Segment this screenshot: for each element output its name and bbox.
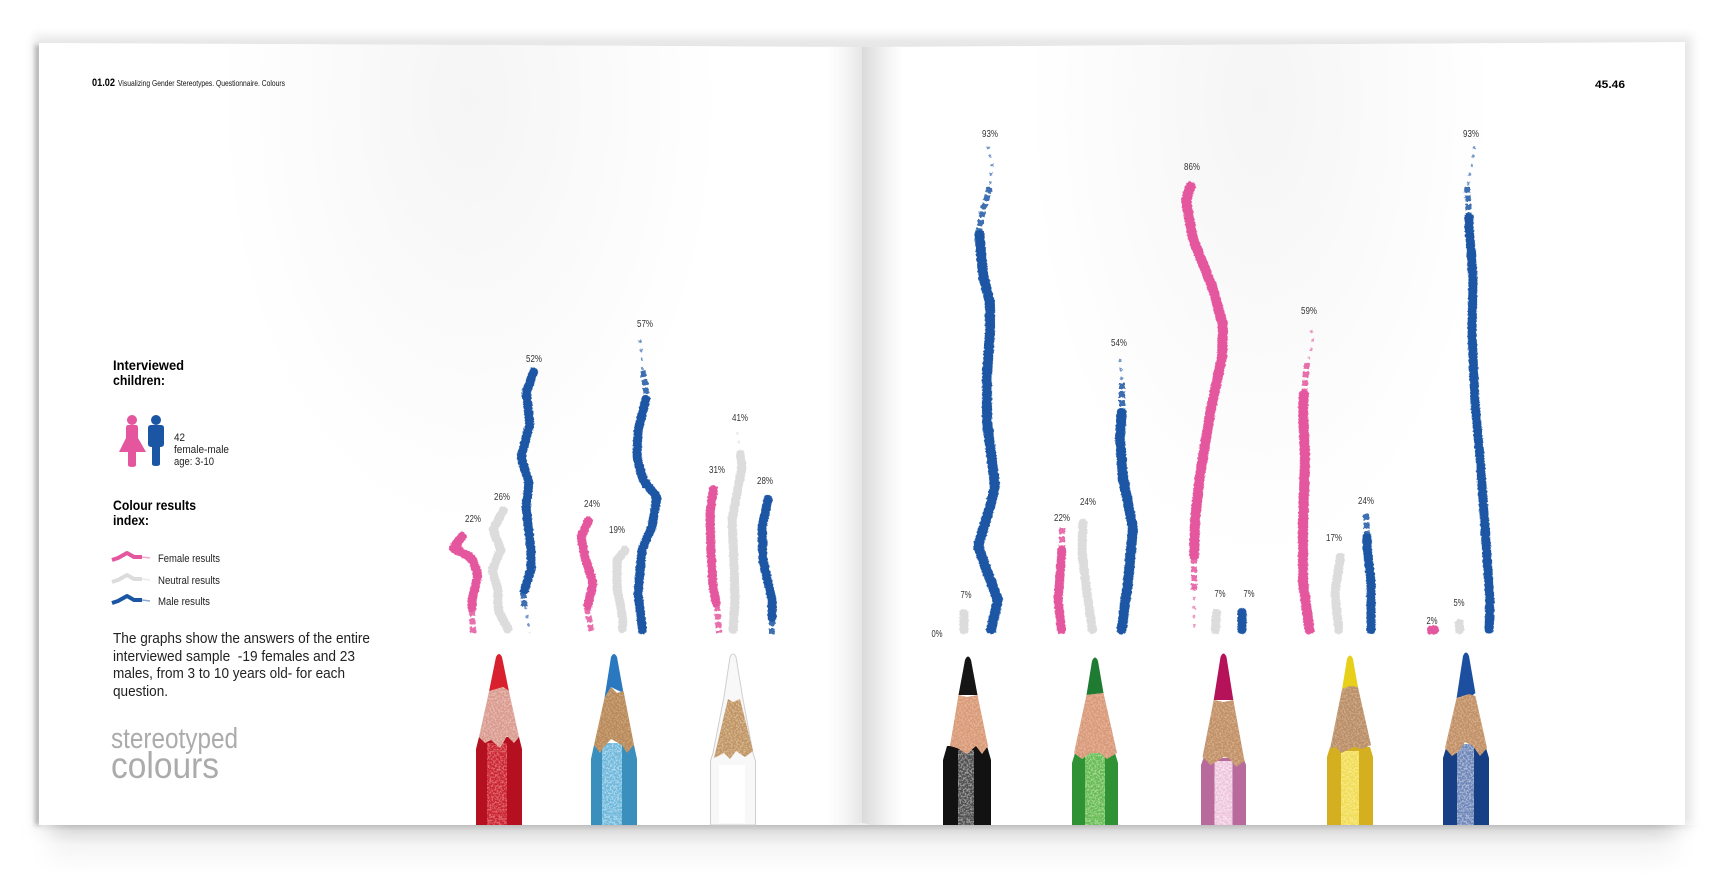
legend: neutral: Neutral results xyxy=(158,575,220,587)
description paragraph: question. xyxy=(113,683,168,700)
chart: white pencil results xyxy=(709,413,773,634)
female 22%: 22% xyxy=(1054,513,1070,524)
neutral 7%: 7% xyxy=(1214,589,1226,600)
female 86% xyxy=(1184,162,1223,632)
pencil: green xyxy=(1072,658,1118,825)
page header left xyxy=(92,77,285,89)
neutral 5%: 5% xyxy=(1454,598,1465,609)
section title xyxy=(111,723,238,786)
female 24%: 24% xyxy=(584,499,600,510)
heading: colour results index xyxy=(113,497,196,528)
pencil: yellow xyxy=(1327,656,1373,825)
male 93%: 93% xyxy=(1463,129,1479,140)
page header left: 01.02 xyxy=(92,77,115,89)
male 57% xyxy=(637,319,657,634)
female 59% xyxy=(1301,306,1317,634)
chart: black pencil results xyxy=(932,129,998,640)
sample size text: 42 xyxy=(174,432,185,444)
page number: 45.46 xyxy=(1595,79,1625,91)
male 28%: 28% xyxy=(757,476,773,487)
female 86%: 86% xyxy=(1184,162,1200,173)
sample size text: age: 3-10 xyxy=(174,456,214,468)
female 31%: 31% xyxy=(709,465,725,476)
neutral 41%: 41% xyxy=(732,413,748,424)
heading: colour results index: Colour results xyxy=(113,497,196,513)
heading: colour results index: index: xyxy=(113,512,149,528)
icon: girl and boy xyxy=(119,415,164,467)
male 52% xyxy=(521,354,542,633)
neutral 26%: 26% xyxy=(494,492,510,503)
section title: stereotyped xyxy=(111,723,238,755)
neutral 17%: 17% xyxy=(1326,533,1342,544)
neutral 24% xyxy=(1080,497,1096,634)
male 28% xyxy=(757,476,773,634)
male 7%: 7% xyxy=(1244,589,1255,600)
female 0%: 0% xyxy=(932,629,943,640)
pencil: navy xyxy=(1443,652,1489,825)
pencil: white xyxy=(710,654,756,825)
neutral 19%: 19% xyxy=(609,525,625,536)
description paragraph: The graphs show the answers of the entire xyxy=(113,630,370,647)
pencil: black xyxy=(943,656,991,825)
neutral 17% xyxy=(1326,533,1342,634)
male 93% xyxy=(978,129,998,634)
neutral 7% xyxy=(1214,589,1226,634)
chart: red pencil results xyxy=(453,354,542,633)
sample size text xyxy=(174,432,229,468)
female 31% xyxy=(709,465,725,633)
female 22% xyxy=(1054,513,1070,634)
heading: interviewed children xyxy=(113,357,184,388)
legend: female: Female results xyxy=(158,553,220,565)
description paragraph: interviewed sample -19 females and 23 xyxy=(113,648,355,665)
female 2% xyxy=(1426,616,1439,630)
section title: colours xyxy=(111,745,219,786)
male 7% xyxy=(1242,589,1255,634)
chart: green pencil results xyxy=(1054,338,1133,634)
female 22% xyxy=(453,514,481,633)
sample size text: female-male xyxy=(174,444,229,456)
male 93% xyxy=(1463,129,1490,634)
pencil: magenta xyxy=(1201,654,1246,825)
neutral 19% xyxy=(609,525,628,633)
neutral 5% xyxy=(1454,598,1465,634)
chart: yellow pencil results xyxy=(1301,306,1374,634)
male 52%: 52% xyxy=(526,354,542,365)
neutral 26% xyxy=(492,492,510,633)
male 57%: 57% xyxy=(637,319,653,330)
chart: magenta pencil results xyxy=(1184,162,1255,634)
heading: interviewed children: Interviewed xyxy=(113,357,184,373)
female 59%: 59% xyxy=(1301,306,1317,317)
female 22%: 22% xyxy=(465,514,481,525)
male 24% xyxy=(1358,496,1374,634)
female 24% xyxy=(581,499,600,633)
neutral 7% xyxy=(960,590,972,634)
neutral 24%: 24% xyxy=(1080,497,1096,508)
male 54% xyxy=(1111,338,1133,634)
legend: male: Male results xyxy=(158,596,210,608)
heading: interviewed children: children: xyxy=(113,372,165,388)
chart: light blue pencil results xyxy=(581,319,657,634)
female 2%: 2% xyxy=(1426,616,1438,627)
neutral 41% xyxy=(732,413,748,634)
male 93%: 93% xyxy=(982,129,998,140)
male 24%: 24% xyxy=(1358,496,1374,507)
neutral 7%: 7% xyxy=(960,590,972,601)
page header left: Visualizing Gender Stereotypes. Questionnaire. Colours xyxy=(118,78,285,88)
description paragraph: males, from 3 to 10 years old- for each xyxy=(113,665,345,682)
pencil: light blue xyxy=(591,654,637,825)
description paragraph xyxy=(113,630,370,700)
male 54%: 54% xyxy=(1111,338,1127,349)
chart: navy pencil results xyxy=(1426,129,1490,634)
pencil: red xyxy=(476,654,522,825)
legend xyxy=(112,553,220,608)
